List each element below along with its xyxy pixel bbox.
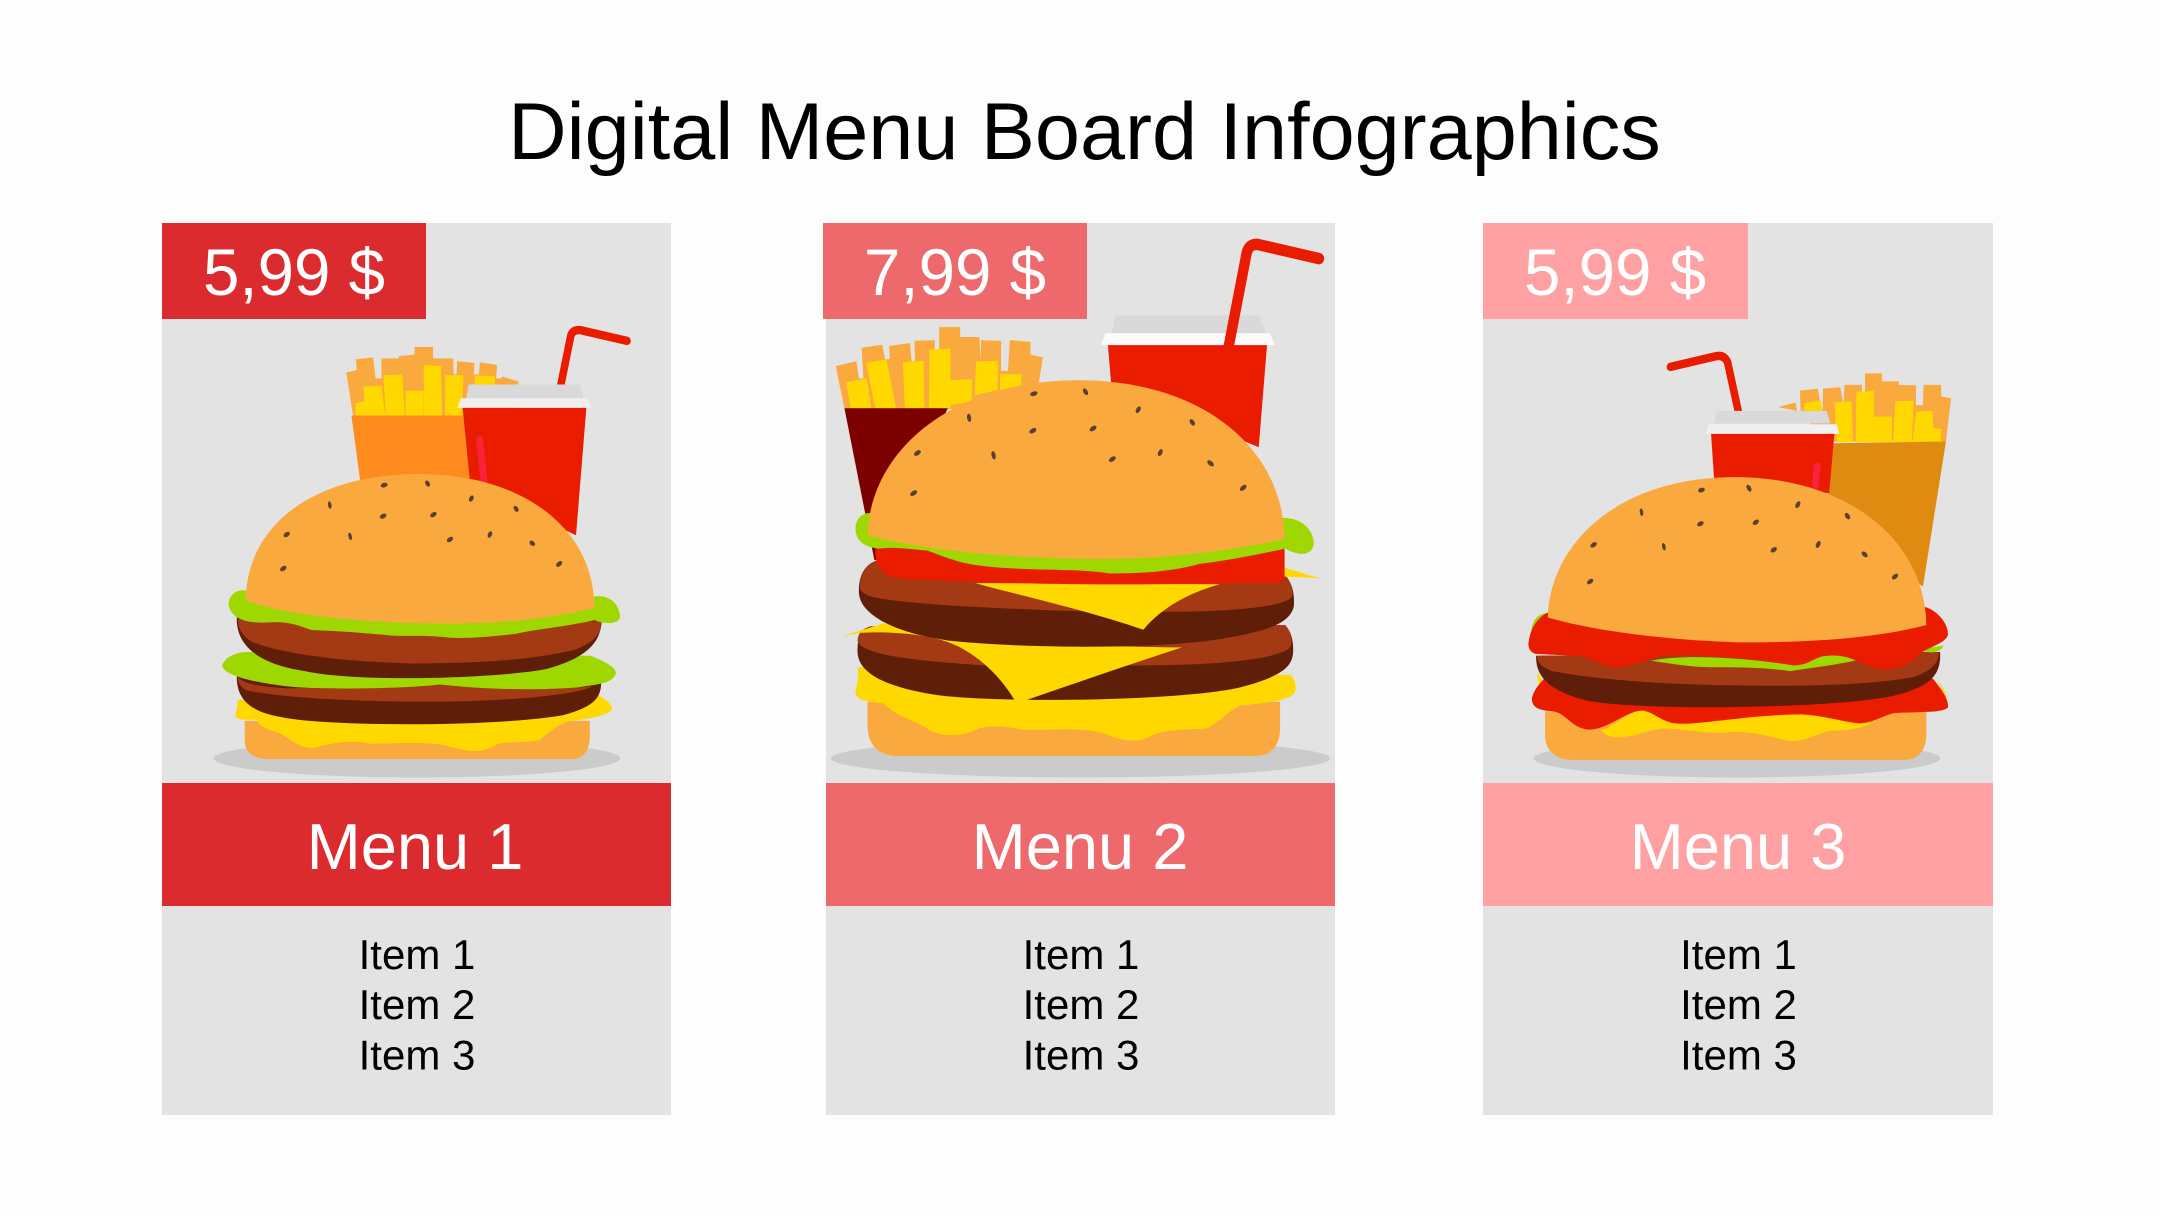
item list 1: Item 1 <box>359 931 475 978</box>
menu header 1: Menu 1 <box>307 810 523 883</box>
item list 3: Item 3 <box>1680 1032 1797 1078</box>
drink cup <box>1670 356 1839 493</box>
menu header 1 <box>162 783 671 906</box>
price tag 1: 5,99 $ <box>203 236 385 309</box>
price tag 2 <box>823 223 1087 319</box>
burger <box>222 474 620 759</box>
item list 2: Item 1 <box>1023 931 1139 978</box>
item list 3: Item 2 <box>1680 981 1797 1028</box>
illustration: burger, fries and drink 2 <box>831 244 1330 777</box>
item list 2 <box>1023 931 1139 1078</box>
item list 1: Item 2 <box>359 981 475 1028</box>
panel 1 background <box>162 223 671 1115</box>
panel: menu 2 <box>823 223 1335 1115</box>
item list 1 <box>359 931 475 1078</box>
panel 3 background <box>1483 223 1993 1115</box>
price tag 3 <box>1483 223 1748 319</box>
title: Digital Menu Board Infographics <box>508 87 1661 177</box>
menu header 3 <box>1483 783 1993 906</box>
illustration: burger, fries and drink 3 <box>1528 356 1951 777</box>
drink cup <box>457 330 627 535</box>
item list 3: Item 1 <box>1680 931 1797 978</box>
price tag 2: 7,99 $ <box>864 236 1046 309</box>
item list 1: Item 3 <box>359 1032 475 1078</box>
burger <box>1528 477 1948 760</box>
shadow <box>831 739 1330 777</box>
shadow <box>214 739 620 777</box>
menu header 3: Menu 3 <box>1630 810 1846 883</box>
panel: menu 3 <box>1483 223 1993 1115</box>
burger <box>841 380 1320 756</box>
shadow <box>1534 739 1940 777</box>
item list 2: Item 2 <box>1023 981 1139 1028</box>
item list 2: Item 3 <box>1023 1032 1139 1078</box>
menu header 2: Menu 2 <box>972 810 1188 883</box>
fries <box>346 347 518 486</box>
fries <box>836 327 1043 560</box>
panel 2 background <box>826 223 1335 1115</box>
item list 3 <box>1680 931 1797 1078</box>
panel: menu 1 <box>162 223 671 1115</box>
price tag 3: 5,99 $ <box>1524 236 1706 309</box>
illustration: burger, fries and drink 1 <box>214 330 627 777</box>
fries <box>1778 373 1951 587</box>
drink cup <box>1101 244 1319 447</box>
menu header 2 <box>826 783 1335 906</box>
price tag 1 <box>162 223 426 319</box>
